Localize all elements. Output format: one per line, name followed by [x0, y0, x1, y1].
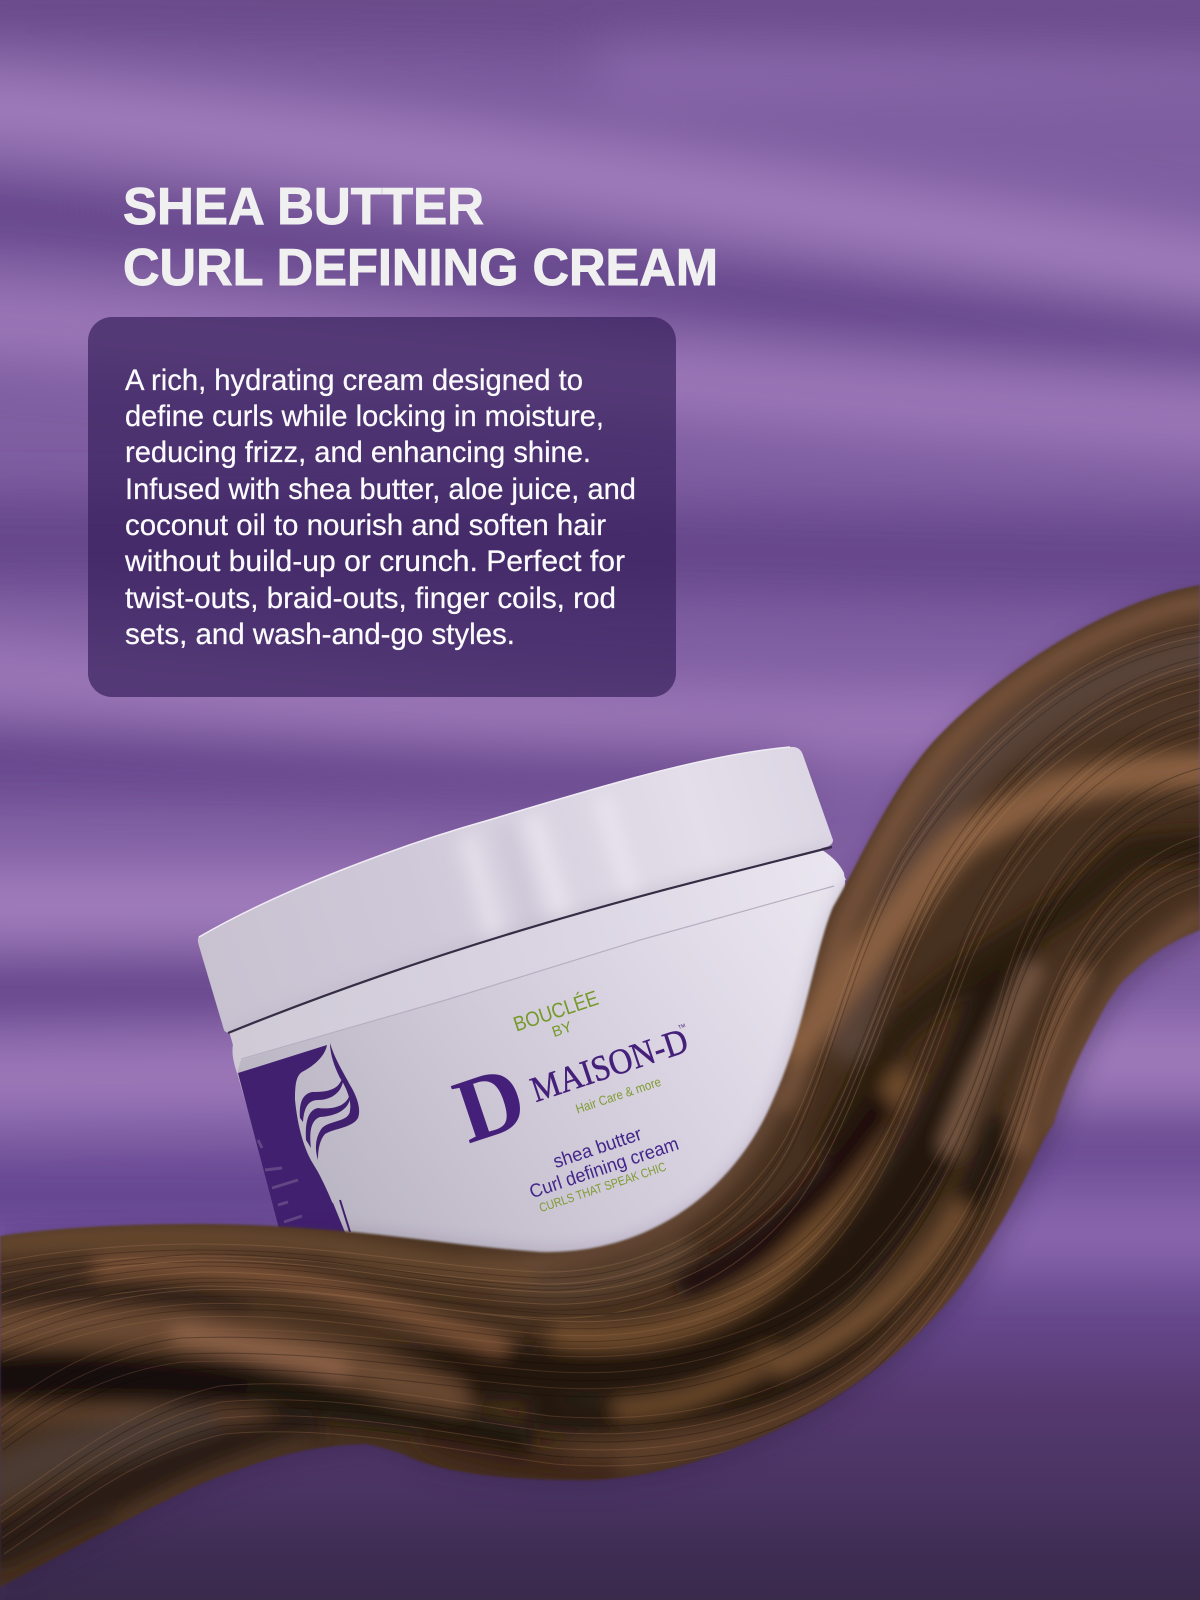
- description text: define curls while locking in moisture,: [125, 400, 604, 433]
- panel: description: [88, 317, 676, 697]
- left lobes: [0, 1237, 520, 1275]
- jar branding: TM: [678, 1023, 686, 1031]
- jar branding: Hair Care & more: [574, 1074, 663, 1116]
- hair shadow: [5, 593, 1200, 1595]
- description text: A rich, hydrating cream designed to: [125, 364, 583, 397]
- description text: reducing frizz, and enhancing shine.: [125, 436, 591, 469]
- jar branding: MAISON-D: [526, 1020, 693, 1110]
- jar branding: Curl defining cream: [527, 1134, 682, 1203]
- jar branding: BY: [550, 1018, 574, 1041]
- description text: twist-outs, braid-outs, finger coils, rod: [125, 582, 616, 615]
- title: SHEA BUTTER: [123, 178, 484, 236]
- hair broad tones: [0, 600, 1200, 1545]
- title: CURL DEFINING CREAM: [123, 239, 718, 297]
- jar lid: [198, 747, 835, 1040]
- hair fine strands: [0, 624, 1200, 1554]
- description text: [124, 364, 636, 651]
- jar branding: D: [442, 1045, 538, 1163]
- lower sweep: [580, 1140, 1040, 1460]
- description text: sets, and wash-and-go styles.: [125, 618, 515, 651]
- jar branding: shea butter: [551, 1124, 645, 1173]
- jar body: [226, 825, 846, 1290]
- jar branding: [434, 963, 728, 1230]
- description text: without build-up or crunch. Perfect for: [124, 545, 625, 578]
- jar: [198, 747, 846, 1290]
- jar label: purple panel with hair silhouette: [238, 1043, 359, 1240]
- description text: coconut oil to nourish and soften hair: [125, 509, 606, 542]
- jar branding: BOUCLÉE: [511, 987, 601, 1036]
- right upper: [785, 600, 1200, 1100]
- title: [123, 178, 718, 297]
- description text: Infused with shea butter, aloe juice, and: [125, 473, 636, 506]
- hair: flowing brown strand: [0, 560, 1200, 1600]
- jar branding: CURLS THAT SPEAK CHIC: [537, 1160, 668, 1215]
